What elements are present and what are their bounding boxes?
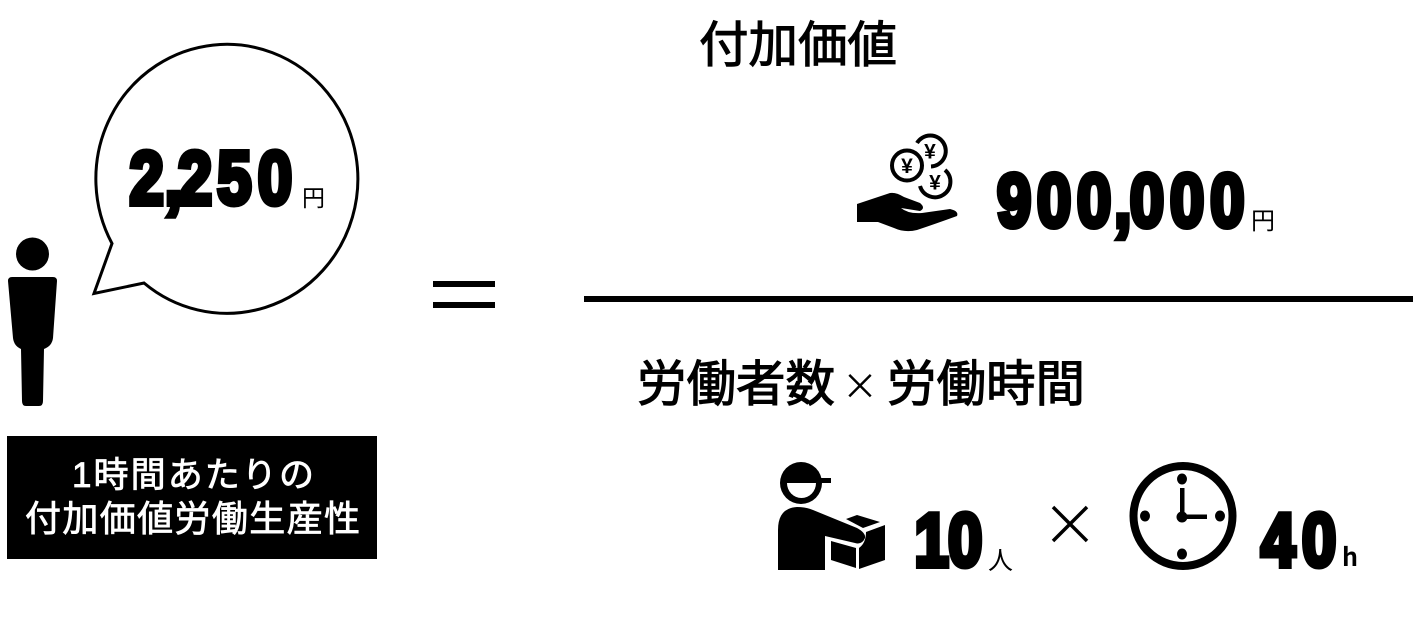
value: 10 people	[914, 498, 1013, 582]
value: 2,250 yen: 円	[302, 179, 325, 213]
label box: 付加価値労働生産性	[25, 498, 360, 539]
value: 900,000 yen: 円	[1251, 201, 1275, 236]
value: 900,000 yen: 900,000	[997, 159, 1244, 243]
value: 10 people: 人	[988, 541, 1013, 577]
label box	[7, 436, 377, 559]
icon: hand with coins: ¥	[901, 155, 913, 178]
equals sign	[433, 281, 495, 308]
icon: hand with coins: ¥	[924, 140, 936, 164]
heading: value added: 付加価値	[699, 6, 897, 77]
fraction bar	[584, 296, 1413, 302]
value: 2,250 yen: 2,250	[130, 136, 292, 220]
multiplication sign	[1053, 507, 1087, 541]
value: 40 hours: 40	[1261, 498, 1336, 582]
icon: delivery worker with box	[778, 462, 885, 570]
heading: workers times hours: ×	[842, 358, 878, 410]
icon: hand with coins	[857, 136, 957, 231]
speech bubble	[94, 44, 358, 313]
icon: person	[8, 238, 57, 406]
value: 10 people: 10	[914, 498, 982, 582]
label box: 1時間あたりの	[72, 456, 314, 495]
icon: clock	[1134, 466, 1232, 566]
icon: hand with coins: ¥	[929, 172, 941, 194]
heading: workers times hours: 労働時間	[887, 345, 1085, 416]
value: 40 hours: h	[1342, 538, 1358, 574]
heading: workers times hours: 労働者数	[637, 345, 835, 416]
